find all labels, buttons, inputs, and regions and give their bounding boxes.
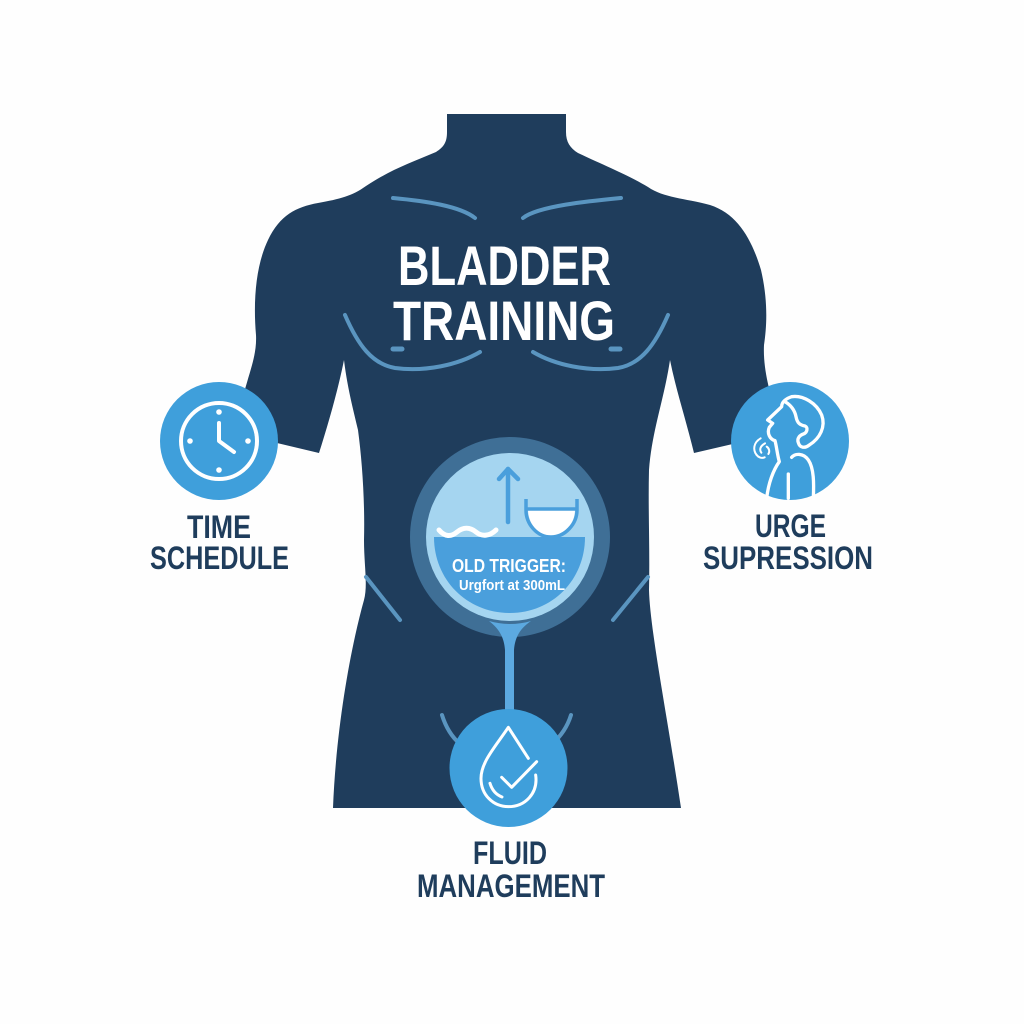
bladder text: OLD TRIGGER: [452,556,566,576]
connector stem [489,621,531,715]
title: BLADDER [398,234,611,297]
icon: head profile [731,382,849,500]
water level [434,537,585,613]
up arrow [499,469,518,522]
label: time schedule: SCHEDULE [150,540,289,576]
body silhouette [242,114,772,808]
bowl icon [526,499,577,537]
label: urge suppression [703,508,873,576]
label: time schedule [150,509,289,576]
label: urge suppression: URGE [755,508,826,544]
title: TRAINING [393,289,615,352]
bladder diagram [410,437,610,637]
label: time schedule: TIME [187,509,251,545]
label: fluid management [417,835,605,904]
label: fluid management: FLUID [473,835,547,871]
waves [439,528,496,536]
chest and abdomen contour lines [345,198,668,744]
label: urge suppression: SUPRESSION [703,540,873,576]
icon: water drop [450,709,568,827]
icon: clock [160,382,278,500]
bladder text [452,556,566,594]
label: fluid management: MANAGEMENT [417,868,605,904]
bladder text: Urgfort at 300mL [459,578,565,594]
title [393,234,615,352]
